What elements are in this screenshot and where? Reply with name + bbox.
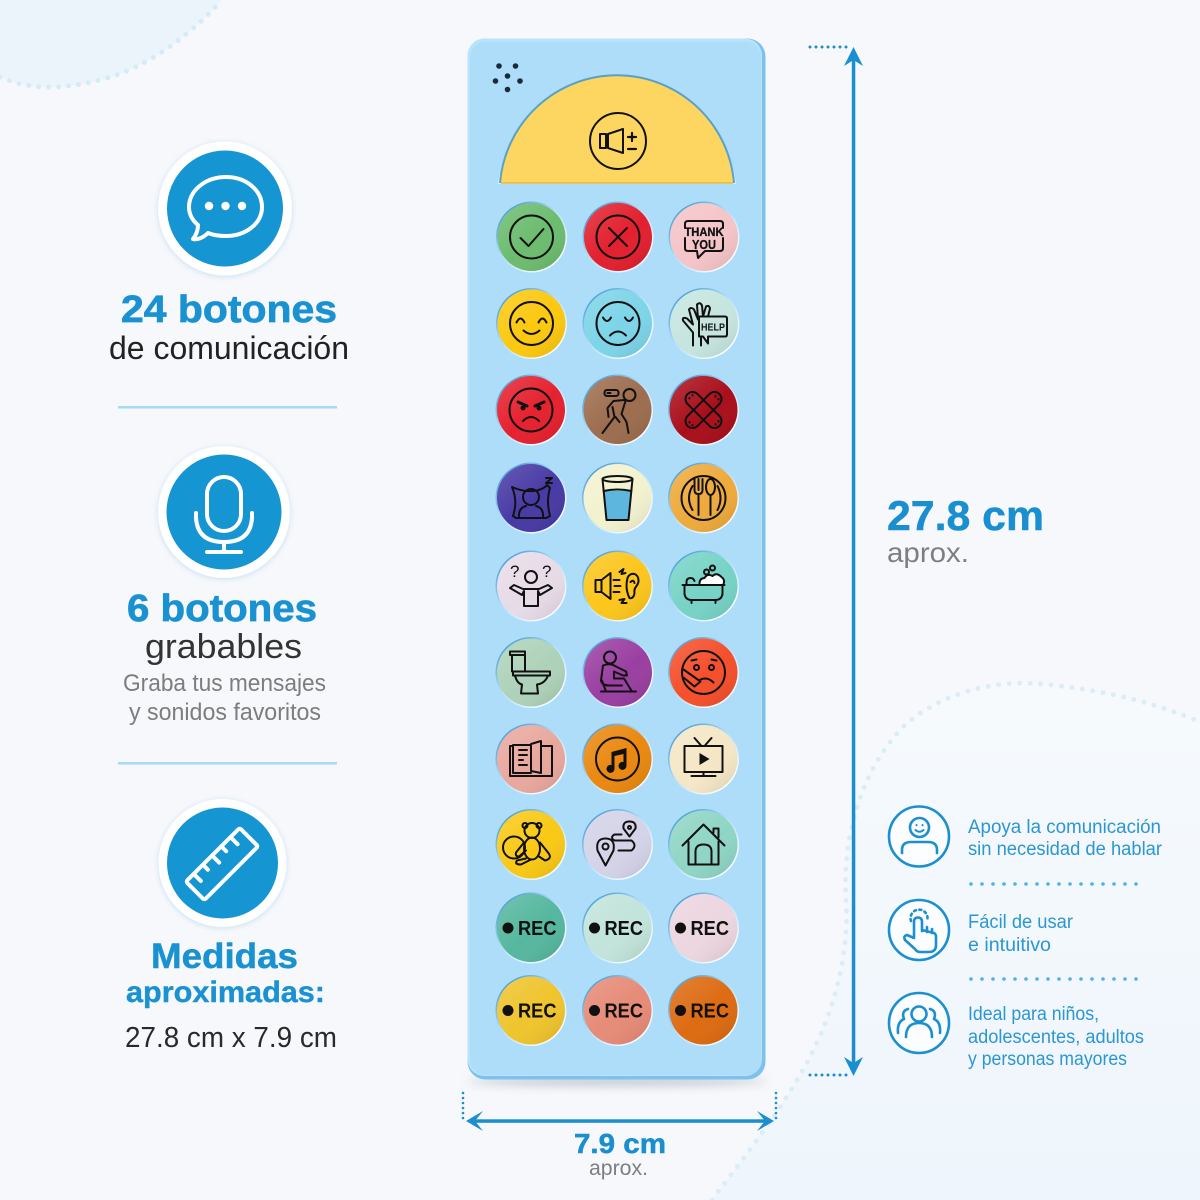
button: bath [668, 550, 739, 622]
button row 2: happy / sad / help [496, 288, 740, 359]
heading: 6 botones: 6 botones [127, 588, 317, 630]
background blob: top left [0, 0, 222, 87]
text: de comunicación: de comunicación [109, 330, 349, 366]
icon: people group [889, 993, 949, 1053]
benefit: ages [889, 993, 1144, 1070]
button: tired [582, 374, 653, 446]
benefit: ages: y personas mayores [968, 1049, 1127, 1070]
heading: aproximadas: aproximadas: [126, 976, 325, 1009]
button: rec pink [668, 892, 739, 964]
button: thank you: THANK [684, 225, 724, 239]
button: rec mint [582, 892, 653, 964]
text: y sonidos favoritos: y sonidos favoritos [129, 699, 321, 726]
text: grabables: grabables [145, 628, 302, 666]
button row 10: recordable [496, 975, 739, 1046]
button: food [668, 462, 739, 534]
button: toys [496, 809, 566, 880]
button: tv [668, 724, 739, 794]
heading: height value: 27.8 cm [887, 492, 1044, 539]
left feature: 24 botones [109, 142, 349, 366]
button: angry [496, 374, 566, 446]
button: read [496, 724, 566, 794]
heading: Medidas: Medidas [151, 937, 298, 976]
text: communication benefit: Apoya la comunicación [968, 817, 1161, 838]
button: no [582, 202, 654, 272]
button: outing [582, 809, 653, 880]
volume button [498, 75, 736, 184]
button: rec teal [496, 892, 566, 964]
text: ease benefit: Fácil de usar [968, 912, 1074, 933]
button: help: HELP [701, 322, 725, 334]
button row 7: read / music / tv [496, 724, 739, 794]
benefit: ease of use [889, 900, 1074, 960]
button row 1: yes / no / thank you [496, 202, 740, 272]
button: rec orange [668, 975, 739, 1046]
button: sitting [582, 637, 654, 708]
button: home [668, 809, 739, 880]
text: width approx: aprox. [589, 1157, 648, 1180]
device body [468, 38, 766, 1080]
left feature: 6 botones [123, 446, 326, 726]
icon: ruler [158, 799, 286, 927]
icon: microphone [158, 446, 290, 578]
button: music [582, 724, 653, 794]
icon: volume [590, 113, 646, 169]
benefit: ease of use: e intuitivo [968, 935, 1051, 956]
icon: tapping hand [889, 900, 949, 960]
speaker holes [493, 63, 523, 92]
button: confused [496, 550, 566, 622]
arrow: height dimension [810, 47, 863, 1076]
text: ages benefit: Ideal para niños, [968, 1004, 1099, 1025]
button: rec yellow: REC [518, 1000, 556, 1022]
button: happy [496, 288, 567, 359]
button: help [668, 288, 740, 359]
text: dimensions: 27.8 cm x 7.9 cm [125, 1022, 337, 1054]
background blob: bottom right [712, 683, 1200, 1200]
button: thank you [668, 202, 740, 272]
button row 3: angry / tired / hurt [496, 374, 739, 446]
button: confused: ? [542, 562, 551, 581]
button: sleep [496, 462, 566, 534]
button row 4: sleep / water / food [496, 462, 739, 534]
button: rec pink: REC [690, 918, 729, 940]
button: toilet [496, 637, 566, 708]
button: confused: ? [510, 562, 519, 581]
button: water [582, 462, 653, 534]
icon: speech bubble [158, 142, 292, 276]
button row 8: toys / outing / home [496, 809, 739, 880]
icon: smiling person [889, 806, 949, 866]
text: height approx: aprox. [887, 537, 969, 568]
button: rec orange: REC [690, 1000, 729, 1022]
button: loud noise [582, 550, 653, 622]
heading: 24 botones: 24 botones [121, 289, 337, 331]
button row 9: recordable [496, 892, 739, 964]
button: hurt [668, 374, 739, 446]
benefit: communication: sin necesidad de hablar [968, 839, 1163, 860]
button: thank you: YOU [692, 237, 716, 252]
button row 6: toilet / sitting / sick [496, 637, 739, 708]
button: rec salmon [582, 975, 653, 1046]
heading: width value: 7.9 cm [574, 1128, 666, 1159]
button: rec mint: REC [604, 918, 643, 940]
button: sick [668, 637, 739, 708]
benefit: ages: adolescentes, adultos [968, 1027, 1144, 1048]
button: yes [496, 202, 567, 272]
arrow: width dimension [463, 1093, 776, 1131]
device: communication board [467, 38, 767, 1086]
left feature: medidas [125, 799, 337, 1054]
text: graba tus mensajes: Graba tus mensajes [123, 670, 326, 697]
benefit: communication [889, 806, 1163, 866]
button: rec yellow [496, 975, 566, 1046]
button: rec teal: REC [518, 918, 556, 940]
button row 5: confused / loud / bath [496, 550, 739, 622]
button: rec salmon: REC [604, 1000, 643, 1022]
button: sad [582, 288, 654, 359]
